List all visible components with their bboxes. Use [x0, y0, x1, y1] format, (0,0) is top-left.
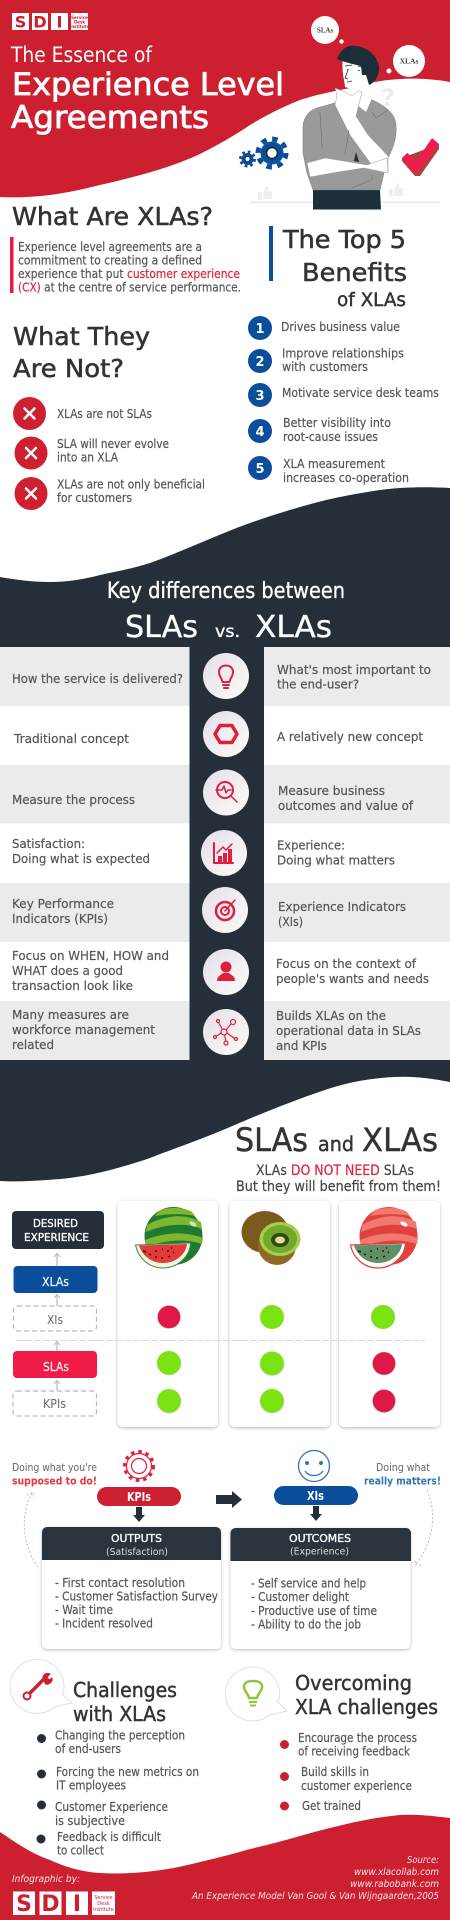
row 7 right: [276, 1009, 421, 1053]
benefit 1: [248, 316, 400, 340]
benefit 4: root-cause issues: [283, 430, 378, 444]
logo: SDI bottom: D: [41, 1892, 60, 1917]
logo: SDI bottom: S: [16, 1892, 32, 1917]
item: [280, 1765, 412, 1793]
row 6 left: WHAT does a good: [12, 964, 123, 978]
logo: SDI top: I: [57, 12, 62, 32]
heading: The Top 5 Benefits of XLAs: [282, 225, 407, 311]
outcomes list: [251, 1576, 377, 1632]
status dots matrix: [157, 1305, 396, 1413]
logo: SDI top: Institute: [70, 24, 89, 29]
row 1 left: How the service is delivered?: [12, 672, 183, 686]
logo: SDI bottom: Desk: [97, 1901, 110, 1907]
item: of receiving feedback: [298, 1744, 410, 1758]
logo: SDI bottom: I: [73, 1892, 81, 1917]
item: not SLAs: XLAs are not SLAs: [57, 407, 152, 421]
box: SLAs: SLAs: [43, 1359, 69, 1374]
title: [10, 43, 284, 136]
outcomes header: (Experience): [290, 1546, 349, 1558]
heading: Challenges with XLAs: with XLAs: [73, 1702, 166, 1726]
source block: [191, 1855, 439, 1902]
definition paragraph: experience that put customer experience: [18, 267, 240, 281]
section: What Are XLAs: [10, 202, 241, 294]
callout: really matters: [364, 1461, 441, 1488]
icon: thumbs up left: [258, 186, 272, 200]
heading: Overcoming XLA challenges: Overcoming: [295, 1671, 412, 1695]
callout: really matters: Doing what: [376, 1461, 431, 1474]
heading: What They Are Not: What They: [13, 322, 150, 351]
row 6 right: Focus on the context of: [276, 957, 417, 971]
pill: KPIs: [97, 1487, 181, 1506]
icon: smiley: [298, 1450, 330, 1482]
box: desired experience: DESIRED: [33, 1217, 78, 1230]
pill: KPIs: KPIs: [127, 1490, 151, 1504]
heading: What They Are Not: Are Not?: [13, 354, 124, 383]
heading: Key differences: XLAs: [255, 610, 332, 645]
item: Encourage the process: [298, 1731, 417, 1745]
benefit 4: [248, 416, 391, 444]
benefit 3: Motivate service desk teams: [282, 386, 439, 400]
outputs list: - Wait time: [55, 1603, 113, 1617]
benefit 1: 1: [255, 322, 265, 337]
definition paragraph: Experience level agreements are a: [18, 240, 202, 254]
benefit 5: [248, 456, 409, 485]
item: [280, 1731, 417, 1758]
icon: check mark: [402, 138, 439, 176]
outcomes list: - Self service and help: [251, 1576, 366, 1590]
outcomes header: OUTCOMES: [289, 1532, 351, 1545]
title: Experience Level: [12, 67, 284, 103]
icon: thumbs up right: [389, 183, 403, 197]
heading: Overcoming XLA challenges: XLA challenges: [295, 1695, 438, 1719]
benefit 2: Improve relationships: [282, 346, 404, 360]
icon: gear outline: [124, 1452, 154, 1480]
row 7 left: workforce management: [12, 1023, 155, 1037]
outcomes list: - Customer delight: [251, 1590, 349, 1604]
source block: www.xlacollab.com: [354, 1867, 439, 1878]
item: [280, 1799, 361, 1813]
benefit 4: Better visibility into: [283, 416, 391, 430]
row 5 right: (XIs): [278, 915, 303, 929]
box: SLAs: [13, 1351, 97, 1378]
item: Build skills in: [301, 1765, 369, 1779]
benefit 1: Drives business value: [281, 320, 400, 334]
accent bar red: [10, 237, 14, 293]
definition paragraph: (CX) at the centre of service performance.: [18, 280, 241, 294]
logo: SDI bottom: Institute: [93, 1907, 114, 1913]
row 6 left: Focus on WHEN, HOW and: [12, 949, 169, 963]
source block: Source:: [407, 1855, 439, 1866]
panel: challenges: [10, 1660, 199, 1858]
row 7 left: related: [12, 1038, 54, 1052]
heading: Challenges with XLAs: Challenges: [73, 1678, 177, 1702]
item: [37, 1800, 168, 1828]
icon: network: [203, 1009, 249, 1055]
heading: SLAs and XLAs: XLAs: [362, 1121, 438, 1159]
callout: supposed to do: [12, 1461, 97, 1488]
benefit 3: [248, 383, 439, 407]
benefit 5: XLA measurement: [283, 457, 385, 471]
ground line: [250, 202, 440, 203]
icon: wrench bubble: [10, 1660, 72, 1714]
row 4 right: [277, 838, 395, 868]
row 6 left: transaction look like: [12, 979, 133, 993]
icon: target: [202, 887, 248, 933]
panel: outcomes: [230, 1528, 411, 1649]
box: KPIs: [13, 1391, 96, 1416]
heading: Key differences: SLAs: [125, 610, 198, 645]
logo: SDI top: [12, 12, 89, 32]
pill: XIs: [274, 1486, 358, 1505]
heading: Key differences: vs.: [215, 622, 240, 642]
source block: www.rabobank.com: [350, 1879, 439, 1890]
fruit: watermelon: [136, 1207, 203, 1268]
thought bubble: SLAs: SLAs: [317, 26, 333, 34]
item: of end-users: [55, 1742, 121, 1756]
row 1 right: What's most important to: [277, 663, 431, 677]
row 5 left: [12, 897, 114, 926]
item: Feedback is difficult: [57, 1830, 161, 1844]
icon: gears: [240, 139, 286, 167]
row 2 right: A relatively new concept: [277, 730, 423, 744]
outcomes list: - Ability to do the job: [251, 1618, 361, 1632]
footer credit: Infographic by:: [12, 1874, 80, 1885]
row 3 right: outcomes and value of: [278, 799, 414, 813]
subheading: [236, 1163, 441, 1195]
logo: SDI top: S: [15, 12, 26, 32]
bottom red wave: [0, 1815, 450, 1920]
outcomes header: [230, 1528, 411, 1561]
item: IT employees: [56, 1778, 126, 1792]
item: never evolve: into an XLA: [57, 450, 119, 464]
item: [37, 1765, 199, 1792]
title: The Essence of: [10, 43, 153, 67]
benefit 5: increases co-operation: [283, 471, 409, 485]
row 4 left: [12, 837, 150, 866]
heading: SLAs and XLAs: SLAs: [235, 1121, 308, 1159]
row 5 left: Key Performance: [12, 897, 114, 911]
arrow down: XIs: [310, 1506, 322, 1521]
item: never evolve: [14, 436, 169, 470]
benefit 2: with customers: [282, 360, 368, 374]
box: XIs: [14, 1306, 96, 1331]
row 7 left: [12, 1008, 155, 1052]
logo: SDI top: D: [33, 12, 47, 32]
arrow up: [54, 1342, 60, 1351]
row 7 right: Builds XLAs on the: [276, 1009, 386, 1023]
outputs list: - First contact resolution: [55, 1576, 185, 1590]
row 3 right: [278, 784, 414, 813]
box: XLAs: XLAs: [42, 1274, 69, 1289]
item: not SLAs: [13, 397, 152, 430]
box: KPIs: KPIs: [43, 1396, 66, 1411]
title: Agreements: [11, 100, 209, 136]
row 3 right: Measure business: [278, 784, 385, 798]
arrow up: [54, 1254, 60, 1266]
outcomes list: - Productive use of time: [251, 1604, 377, 1618]
item: [37, 1728, 185, 1756]
dark wave background: [0, 487, 450, 1181]
icon: hexagon gear: [203, 711, 249, 757]
man figure: [303, 46, 396, 210]
comparison table: [0, 647, 450, 1060]
row 4 right: Experience:: [277, 838, 345, 852]
heading: What Are XLAs: What Are XLAs?: [12, 202, 213, 231]
benefit 3: 3: [255, 389, 265, 404]
row 7 right: and KPIs: [276, 1039, 327, 1053]
pill: XIs: XIs: [307, 1489, 324, 1503]
outputs list: [55, 1576, 218, 1630]
item: not only customers: [14, 477, 205, 510]
dotted arrow right: [415, 1490, 433, 1565]
definition paragraph: commitment to creating a defined: [18, 254, 202, 268]
icon: magnifier: [203, 770, 249, 816]
outputs list: - Incident resolved: [55, 1616, 153, 1630]
heading: SLAs and XLAs: and: [318, 1132, 354, 1156]
logo: SDI bottom: [13, 1892, 115, 1917]
icon: question mark: ?: [381, 84, 395, 112]
icon: bar chart: [201, 830, 247, 876]
fruit: kiwi: [242, 1211, 300, 1265]
accent bar blue: [269, 226, 273, 281]
item: Changing the perception: [55, 1728, 185, 1742]
panel: outputs: [42, 1527, 221, 1649]
heading: Key differences: [107, 579, 345, 645]
item: is subjective: [55, 1814, 125, 1828]
item: never evolve: SLA will never evolve: [57, 437, 169, 451]
subheading: XLAs DO NOT NEED SLAs: [256, 1163, 414, 1179]
row 6 right: people's wants and needs: [276, 972, 429, 986]
benefit 4: 4: [255, 425, 265, 440]
row 4 left: Doing what is expected: [12, 852, 150, 866]
benefit 5: 5: [255, 462, 265, 477]
row backgrounds: [0, 647, 450, 1060]
thought bubble: XLAs: [386, 45, 425, 77]
heading: The Top 5 Benefits of XLAs: of XLAs: [337, 289, 406, 311]
row 6 right: [276, 957, 429, 986]
logo: SDI top: Desk: [74, 20, 85, 24]
box: XLAs: [14, 1266, 98, 1293]
row 1 right: [277, 663, 431, 692]
row 2 left: Traditional concept: [13, 732, 129, 746]
item: Forcing the new metrics on: [56, 1765, 199, 1779]
definition paragraph: [18, 240, 241, 294]
fruit: red watermelon: [350, 1207, 418, 1268]
icon: bulb bubble: [226, 1667, 287, 1721]
heading: The Top 5 Benefits of XLAs: The Top 5: [282, 225, 406, 254]
logo: SDI top: Service: [71, 15, 88, 20]
arrow right: [216, 1491, 242, 1508]
panel: overcoming challenges: [226, 1667, 438, 1813]
box: desired experience: EXPERIENCE: [24, 1231, 89, 1244]
dotted arrow left: [24, 1492, 38, 1567]
header red wave background: [0, 0, 450, 197]
heading: What They Are Not: [13, 322, 150, 383]
heading: Challenges with XLAs: [73, 1678, 177, 1726]
outputs list: - Customer Satisfaction Survey: [55, 1590, 218, 1604]
row 5 right: [278, 900, 406, 929]
row 7 right: operational data in SLAs: [276, 1024, 421, 1038]
item: customer experience: [301, 1779, 412, 1793]
icon: person: [203, 949, 249, 995]
arrow up: [54, 1294, 60, 1306]
row 4 right: Doing what matters: [277, 854, 395, 868]
benefit 2: 2: [255, 355, 265, 370]
row 6 left: [12, 949, 169, 993]
fruit cards: [118, 1201, 440, 1427]
outputs header: (Satisfaction): [106, 1547, 168, 1558]
heading: The Top 5 Benefits of XLAs: Benefits: [302, 258, 407, 287]
arrow up: [54, 1380, 60, 1391]
item: not only customers: XLAs are not only beneficial: [57, 478, 205, 492]
arrow down: KPIs: [133, 1507, 145, 1522]
outputs header: OUTPUTS: [111, 1532, 162, 1545]
callout: supposed to do: Doing what you're: [12, 1461, 97, 1474]
benefit 2: [248, 346, 404, 374]
row 3 left: Measure the process: [12, 793, 135, 807]
section: What They Are Not: [13, 322, 205, 510]
item: to collect: [57, 1844, 104, 1858]
outputs header: [42, 1527, 221, 1560]
callout: supposed to do: supposed to do!: [12, 1474, 97, 1488]
item: Get trained: [302, 1799, 361, 1813]
row 5 right: Experience Indicators: [278, 900, 406, 914]
logo: SDI bottom: Service: [94, 1895, 113, 1901]
layer stack: [12, 1211, 104, 1416]
box: desired experience: [12, 1211, 104, 1249]
row 7 left: Many measures are: [12, 1008, 129, 1022]
thought bubble: SLAs: [311, 16, 344, 44]
section: Top 5 Benefits: [248, 225, 439, 485]
item: [36, 1830, 161, 1858]
box: XIs: XIs: [47, 1312, 63, 1327]
row 4 left: Satisfaction:: [12, 837, 85, 851]
heading: Overcoming XLA challenges: [295, 1671, 438, 1719]
row 1 right: the end-user?: [277, 678, 359, 692]
heading: Key differences: Key differences between: [107, 579, 345, 604]
icon: light bulb: [203, 653, 249, 699]
thought bubble: XLAs: XLAs: [400, 56, 418, 66]
heading: SLAs and XLAs: [235, 1121, 441, 1195]
illustration: thinking man: [240, 16, 440, 210]
row 5 left: Indicators (KPIs): [12, 912, 108, 926]
item: not only customers: for customers: [57, 491, 132, 505]
item: Customer Experience: [55, 1800, 168, 1814]
